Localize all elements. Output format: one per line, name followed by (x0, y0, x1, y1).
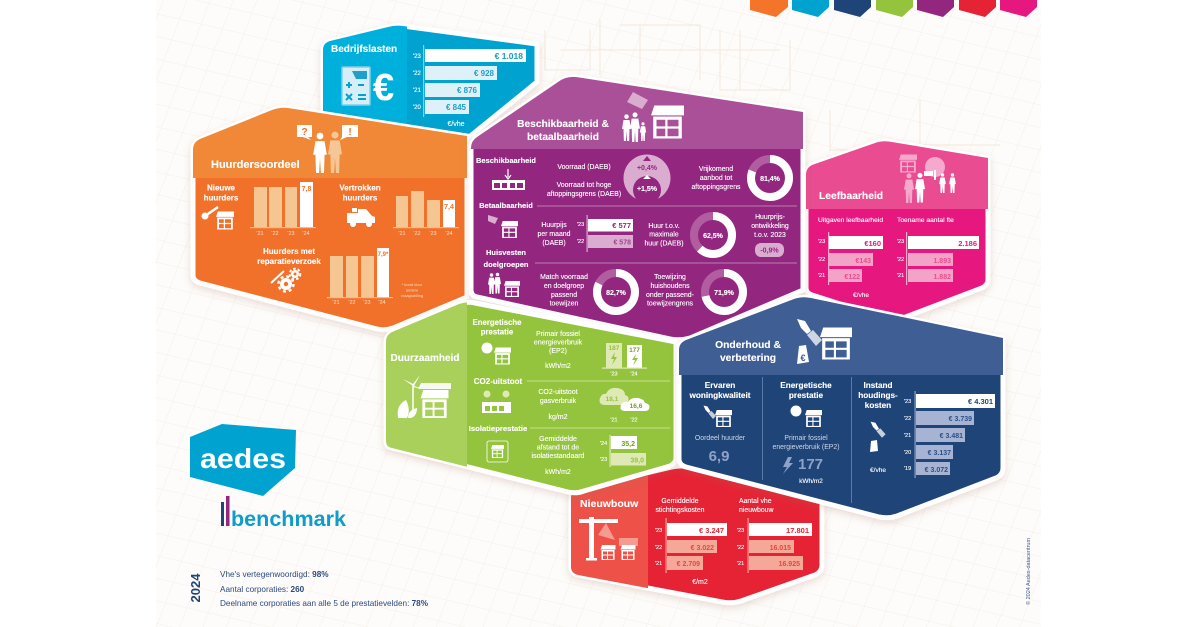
panel: Beschikbaarheid en betaalbaarheid (465, 70, 810, 340)
column: energetische prestatie: Energetische (780, 381, 832, 390)
column: instandhoudingskosten: €/vhe (870, 467, 886, 474)
donut: 82,7% (597, 273, 635, 311)
key figures: 78% (412, 599, 429, 608)
chart: CO2 clouds: '22 (630, 418, 638, 424)
donut: 62,5%: 62,5% (703, 233, 724, 240)
key figures: Aantal corporaties: (220, 585, 291, 594)
chart: isolatie: '24 (600, 441, 607, 447)
chart: uitgaven leefbaarheid: €160 (864, 239, 881, 248)
chart: uitgaven leefbaarheid: €143 (855, 258, 871, 265)
bar chart: instandhoudingskosten (904, 391, 995, 478)
chart: toename aantal fte: Toename aantal fte (897, 217, 954, 224)
panel shape: Huurdersoordeel (190, 100, 470, 330)
chart: nieuwe huurders: '22 (271, 231, 279, 237)
text: match voorraad: Match voorraad (540, 274, 588, 281)
text: match voorraad: en doelgroep (544, 283, 584, 290)
bar chart: instandhoudingskosten: € 3.481 (940, 433, 963, 440)
chart: toename aantal fte: 2.186 (958, 239, 977, 248)
bar chart: instandhoudingskosten: € 3.137 (928, 450, 951, 457)
key figures: Vhe's vertegenwoordigd: (220, 570, 312, 579)
callout: huurprijsontwikkeling: ontwikkeling (751, 223, 789, 230)
chart: isolatie: 35,2 (621, 441, 635, 448)
section: Huisvesten doelgroepen (483, 248, 797, 297)
column: energetische prestatie: 177 (798, 456, 823, 473)
text: huur t.o.v. maximale huur: Huur t.o.v. (648, 223, 680, 230)
chart: uitgaven leefbaarheid: Uitgaven leefbaarheid (818, 217, 883, 224)
icon: moving truck (347, 208, 375, 227)
donut: 82,7%: 82,7% (606, 290, 627, 297)
text: toewijzing huishoudens: huishoudens (650, 283, 690, 290)
chart: EP2: '24 (630, 372, 638, 378)
footnote: vraagstelling (401, 293, 423, 298)
icon: neighbourhood (899, 154, 956, 203)
bar chart: bedrijfslasten: '21 (413, 88, 421, 94)
chart: aantal vhe nieuwbouw: 16.015 (770, 545, 791, 552)
icon: tenants with speech bubbles: ! (348, 127, 352, 138)
chart: huurprijs per maand: € 577 (612, 221, 631, 230)
chart: toename aantal fte: '23 (897, 239, 904, 245)
chart: uitgaven leefbaarheid: '22 (818, 257, 825, 263)
section: CO2-uitstoot (474, 377, 670, 421)
chart: uitgaven leefbaarheid: '23 (818, 239, 825, 245)
section: energetische prestatie: Energetische (473, 318, 522, 327)
heading: Onderhoud en verbetering: verbetering (720, 353, 776, 364)
column: ervaren woningkwaliteit: Ervaren (705, 381, 735, 390)
section: Isolatieprestatie: Isolatieprestatie (469, 424, 528, 433)
panel: Onderhoud en verbetering (675, 290, 1010, 518)
section: energetische prestatie (473, 318, 583, 370)
chart: uitgaven leefbaarheid: €/vhe (853, 292, 869, 299)
chart: uitgaven leefbaarheid: €122 (844, 274, 860, 281)
logo: benchmark (221, 496, 346, 531)
bar chart: bedrijfslasten: €/vhe (447, 121, 465, 128)
icon: crane and houses (579, 517, 638, 560)
text: toewijzing huishoudens: onder passend- (646, 292, 694, 299)
chart: CO2 clouds: 18,1 (606, 396, 619, 403)
chart: nieuwe huurders: huurders (204, 194, 239, 202)
bar chart: bedrijfslasten: € 845 (446, 103, 467, 112)
chart: aantal vhe nieuwbouw: '21 (737, 561, 744, 567)
bar chart: bedrijfslasten: '23 (413, 54, 421, 60)
chart: huurders met reparatieverzoek: reparatieverzoek (257, 257, 321, 266)
chart: stichtingskosten (655, 498, 727, 586)
bar chart: instandhoudingskosten: '22 (904, 416, 911, 422)
section: Beschikbaarheid: Beschikbaarheid (476, 156, 536, 165)
chart: huurders met reparatieverzoek: '23 (363, 300, 371, 306)
chart: huurprijs per maand: Huurpijs (541, 222, 567, 229)
section: CO2-uitstoot: kg/m2 (548, 414, 568, 421)
section: energetische prestatie: energieverbruik (534, 340, 583, 346)
bar chart: bedrijfslasten (413, 45, 526, 128)
logo: Aedes: aedes (200, 443, 286, 474)
chart: nieuwe huurders: Nieuwe (207, 184, 236, 192)
heading: Nieuwbouw: Nieuwbouw (580, 498, 639, 510)
chart: toename aantal fte: '21 (897, 273, 904, 279)
chart: huurders met reparatieverzoek: Huurders met (263, 247, 315, 256)
chart: EP2: 187 (609, 345, 620, 352)
icon: family, tag and house (622, 92, 684, 142)
heading: Bedrijfslasten: Bedrijfslasten (331, 44, 397, 55)
key figures: 260 (291, 585, 305, 594)
chart: vertrokken huurders: '22 (413, 231, 421, 237)
column: instandhoudingskosten: Instand (863, 381, 893, 390)
chart: EP2 (602, 343, 647, 378)
chart: isolatie (600, 435, 646, 467)
text: match voorraad: passend (551, 292, 577, 299)
chart: nieuwe huurders: 7,8 (302, 186, 311, 193)
chart: uitgaven leefbaarheid (818, 217, 883, 299)
chart: huurprijs per maand: (DAEB) (542, 240, 566, 247)
section: energetische prestatie: kWh/m2 (545, 363, 571, 370)
bar chart: instandhoudingskosten: '20 (904, 450, 911, 456)
chart: nieuwe huurders: '23 (287, 231, 295, 237)
chart: vertrokken huurders: Vertrokken (339, 184, 381, 192)
chart: CO2 clouds: 16,6 (630, 403, 643, 410)
donut: 81,4% (751, 159, 789, 197)
chart: CO2 clouds: '21 (610, 418, 618, 424)
bar chart: instandhoudingskosten: € 4.301 (968, 397, 993, 406)
chart: vertrokken huurders: '23 (429, 231, 437, 237)
heading: Duurzaamheid: Duurzaamheid (391, 353, 459, 364)
section: Betaalbaarheid: Betaalbaarheid (479, 201, 533, 210)
key figures: Deelname corporaties aan alle 5 de prestatievelden: (220, 599, 412, 608)
column: ervaren woningkwaliteit: 6,9 (709, 448, 729, 465)
text: huur t.o.v. maximale huur: maximale (649, 232, 679, 239)
chart: toename aantal fte (897, 217, 979, 285)
chart: toename aantal fte: 1.893 (933, 258, 951, 265)
chart: aantal vhe nieuwbouw: 17.801 (786, 526, 809, 535)
bar chart: bedrijfslasten: '20 (413, 105, 421, 111)
section: CO2-uitstoot: CO2-uitstoot (538, 389, 578, 396)
section: energetische prestatie: prestatie (481, 328, 514, 336)
chart: stichtingskosten: € 3.247 (699, 526, 724, 535)
section: Beschikbaarheid: aftoppingsgrens (DAEB) (547, 191, 621, 198)
donut: 81,4%: 81,4% (760, 176, 781, 183)
icon: brush, tag and house: € (800, 353, 806, 363)
footnote: andere (406, 288, 419, 292)
logo: benchmark: benchmark (231, 508, 346, 531)
bar chart: instandhoudingskosten: '21 (904, 433, 911, 439)
chart: stichtingskosten: stichtingskosten (655, 507, 705, 514)
icon: key and house (202, 207, 234, 230)
section: Beschikbaarheid: Voorraad tot hoge (557, 182, 612, 189)
heading: Huurdersoordeel: Huurdersoordeel (211, 159, 300, 171)
chart: stichtingskosten: '21 (655, 561, 662, 567)
panel: Nieuwbouw (565, 460, 822, 610)
background band with grid (156, 0, 1041, 627)
heading: Beschikbaarheid en betaalbaarheid: betaalbaarheid (527, 132, 599, 143)
chart: huurders met reparatieverzoek: '22 (348, 300, 356, 306)
column: ervaren woningkwaliteit: Oordeel huurder (695, 435, 746, 442)
section: energetische prestatie: (EP2) (549, 348, 567, 355)
chart: isolatie: '23 (600, 457, 607, 463)
chart: CO2 clouds (600, 388, 650, 424)
chart: huurders met reparatieverzoek: '21 (332, 300, 340, 306)
chart: huurprijs per maand: '22 (577, 239, 584, 245)
text: toewijzing huishoudens: toewijzengrens (647, 300, 694, 308)
section: energetische prestatie: Primair fossiel (536, 331, 580, 338)
chart: aantal vhe nieuwbouw: nieuwbouw (739, 507, 774, 514)
section: Huisvesten doelgroepen: Huisvesten (486, 248, 526, 257)
text: huur t.o.v. maximale huur: huur (DAEB) (644, 240, 684, 247)
chart: stichtingskosten: €/m2 (692, 579, 708, 586)
chart: vertrokken huurders: 7,4 (444, 204, 454, 211)
chart: stichtingskosten: Gemiddelde (661, 498, 699, 505)
chart: huurprijs per maand: € 578 (613, 240, 631, 246)
chart: aantal vhe nieuwbouw: '23 (737, 528, 744, 534)
top colour tabs (750, 0, 1037, 17)
panel: Duurzaamheid (380, 295, 676, 500)
chart: EP2: 177 (629, 347, 640, 354)
column: energetische prestatie: prestatie (789, 391, 824, 400)
donut: 71,9% (705, 273, 743, 311)
chart: huurders met reparatieverzoek: '24 (378, 300, 386, 306)
callout: huurprijsontwikkeling: -0,9% (760, 248, 779, 254)
chart: toename aantal fte: '22 (897, 257, 904, 263)
panel shape: Duurzaamheid (380, 295, 676, 500)
panel shape: Leefbaarheid (800, 135, 992, 320)
column: energetische prestatie: kWh/m2 (799, 478, 823, 485)
footnote: * komt door (402, 282, 423, 287)
chart: isolatie: 39,0 (630, 458, 644, 464)
text: vrijkomend aanbod: aanbod tot (700, 175, 732, 182)
callout: huurprijsontwikkeling: t.o.v. 2023 (754, 232, 786, 239)
panel: Huurdersoordeel (190, 100, 470, 330)
bar chart: bedrijfslasten: € 928 (474, 69, 495, 78)
section: CO2-uitstoot: CO2-uitstoot (474, 377, 523, 386)
chart: huurprijs per maand: '23 (577, 222, 584, 228)
donut: 71,9%: 71,9% (714, 290, 735, 297)
chart: nieuwe huurders (204, 182, 316, 237)
chart: stichtingskosten: '23 (655, 528, 662, 534)
chart: vertrokken huurders: '24 (445, 231, 453, 237)
column: ervaren woningkwaliteit (689, 381, 751, 465)
column: instandhoudingskosten: kosten (865, 401, 891, 410)
chart: aantal vhe nieuwbouw: '22 (737, 545, 744, 551)
icon: windmill, leaves and solar house (398, 375, 451, 418)
heading: Beschikbaarheid en betaalbaarheid: Beschikbaarheid & (517, 119, 609, 130)
icon: tenants with speech bubbles: ? (301, 127, 308, 138)
column: ervaren woningkwaliteit: woningkwaliteit (689, 391, 751, 400)
chart: voorraad circles: +1,5% (637, 186, 658, 193)
chart: huurders met reparatieverzoek (257, 247, 393, 306)
bar chart: instandhoudingskosten: € 3.739 (949, 416, 972, 423)
column: energetische prestatie: energieverbruik (EP2) (772, 444, 840, 451)
section: Isolatieprestatie: afstand tot de (537, 444, 579, 452)
text: vrijkomend aanbod: aftoppingsgrens (691, 184, 741, 191)
bar chart: bedrijfslasten: '22 (413, 71, 421, 77)
panel shape: Bedrijfslasten (320, 20, 537, 140)
icon: euro sign: € (373, 67, 394, 109)
chart: voorraad circles: +0,4% (637, 165, 658, 172)
chart: stichtingskosten: € 3.022 (691, 545, 714, 552)
chart: toename aantal fte: 1.882 (933, 274, 951, 281)
chart: vertrokken huurders (339, 184, 459, 237)
panel shape: Nieuwbouw (565, 460, 822, 610)
bar chart: bedrijfslasten: € 876 (457, 86, 478, 95)
year label: 2024 (188, 573, 203, 602)
heading: Onderhoud en verbetering: Onderhoud & (715, 340, 781, 351)
section: Isolatieprestatie: kWh/m2 (545, 469, 571, 476)
chart: aantal vhe nieuwbouw: Aantal vhe (739, 498, 772, 505)
text: vrijkomend aanbod: Vrijkomend (699, 166, 733, 173)
logo: Aedes (190, 424, 296, 496)
column: energetische prestatie (762, 377, 840, 485)
chart: huurprijs per maand (538, 215, 633, 252)
callout: huurprijsontwikkeling (751, 214, 789, 257)
copyright: © 2024 Aedes-datacentrum (1025, 538, 1032, 605)
callout: huurprijsontwikkeling: Huurprijs- (755, 214, 785, 221)
chart: nieuwe huurders: '21 (256, 231, 264, 237)
panel shape: Beschikbaarheid (465, 70, 810, 340)
section: Beschikbaarheid: Voorraad (DAEB) (557, 164, 611, 171)
chart: nieuwe huurders: '24 (302, 231, 310, 237)
bar chart: instandhoudingskosten: '23 (904, 399, 911, 405)
chart: huurprijs per maand: per maand (538, 231, 571, 238)
chart: aantal vhe nieuwbouw: 16.925 (779, 561, 800, 568)
chart: aantal vhe nieuwbouw (737, 498, 812, 573)
donut: 62,5% (694, 216, 732, 254)
chart: vertrokken huurders: huurders (343, 194, 378, 202)
section: Beschikbaarheid (476, 156, 621, 198)
key figures: 98% (312, 570, 329, 579)
panel shape: Onderhoud (675, 290, 1010, 518)
chart: huurders met reparatieverzoek: 7,9* (378, 252, 389, 258)
section: CO2-uitstoot: gasverbruik (540, 398, 577, 405)
column: energetische prestatie: Primair fossiel (784, 435, 828, 442)
text: toewijzing huishoudens: Toewijzing (654, 274, 686, 281)
text: match voorraad: toewijzen (550, 300, 579, 308)
section: Isolatieprestatie: isolatiestandaard (532, 453, 585, 460)
chart: EP2: '23 (610, 372, 618, 378)
bar chart: instandhoudingskosten: € 3.072 (925, 467, 948, 474)
chart: stichtingskosten: € 2.709 (677, 561, 700, 568)
icon: calculator (342, 67, 370, 105)
section: Isolatieprestatie (469, 424, 670, 476)
icon: tenants with speech bubbles (297, 125, 358, 173)
icon: brush, tag and house (797, 319, 852, 364)
panel: Bedrijfslasten (320, 20, 537, 140)
panel: Leefbaarheid (800, 135, 992, 320)
chart: stichtingskosten: '22 (655, 545, 662, 551)
column: instandhoudingskosten: houdings- (858, 391, 898, 400)
section: Betaalbaarheid (479, 201, 797, 238)
chart: uitgaven leefbaarheid: '21 (818, 273, 825, 279)
icon: gears and wrench (271, 269, 300, 292)
chart: vertrokken huurders: '21 (398, 231, 406, 237)
chart: voorraad circles (624, 154, 670, 204)
heading: Leefbaarheid: Leefbaarheid (819, 191, 883, 202)
section: Huisvesten doelgroepen: doelgroepen (483, 260, 529, 269)
bar chart: instandhoudingskosten: '19 (904, 466, 911, 472)
section: Isolatieprestatie: Gemiddelde (539, 436, 577, 443)
bar chart: bedrijfslasten: € 1.018 (495, 51, 523, 61)
column: instandhoudingskosten (851, 377, 898, 503)
